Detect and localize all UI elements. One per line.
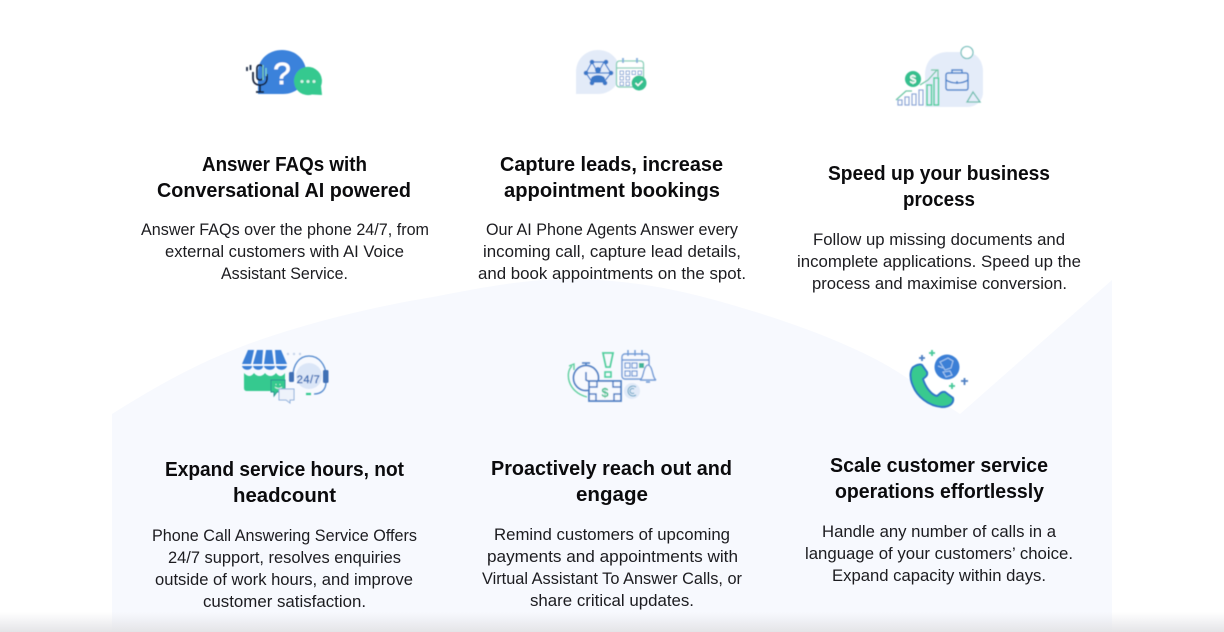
heading: capture leads: appointment bookings [504, 179, 720, 202]
heading: answer FAQs: Conversational AI powered [157, 179, 411, 202]
background wave shape [112, 279, 1112, 632]
text block: expand service hours: customer satisfaction. [203, 593, 366, 611]
text block: proactively reach out: share critical updates. [530, 592, 694, 610]
text block: capture leads [478, 221, 746, 283]
heading: capture leads: Capture leads, increase [500, 153, 723, 176]
text block: answer FAQs [141, 221, 429, 283]
heading: capture leads [500, 153, 723, 202]
text block: scale customer service: Handle any number of calls in a [822, 523, 1057, 541]
heading: proactively reach out: Proactively reach out and [491, 457, 732, 480]
text block: answer FAQs: Assistant Service. [221, 265, 348, 283]
heading: speed up business: Speed up your business [828, 162, 1050, 185]
text block: proactively reach out: Virtual Assistant To Answer Calls, or [482, 570, 742, 588]
heading: expand service hours [165, 458, 404, 507]
text block: expand service hours: outside of work hours, and improve [155, 571, 413, 589]
icon: stopwatch, money, alert and calendar bell: $ [601, 385, 609, 400]
text block: proactively reach out: payments and appointments with [487, 548, 738, 566]
heading: answer FAQs [157, 153, 411, 202]
icon: network and calendar [576, 50, 646, 94]
text block: speed up business [797, 231, 1081, 293]
panel: proactively reach out [482, 350, 742, 610]
heading: expand service hours: headcount [233, 484, 336, 507]
text block: speed up business: incomplete applications. Speed up the [797, 253, 1081, 271]
icon: growth chart and briefcase: $ [910, 72, 917, 86]
text block: answer FAQs: Answer FAQs over the phone 24/7, from [141, 221, 429, 239]
heading: scale customer service: operations effortlessly [835, 480, 1045, 503]
panel: answer FAQs [141, 50, 429, 283]
icon: phone with globe [911, 350, 968, 407]
text block: expand service hours: Phone Call Answering Service Offers [152, 527, 417, 545]
icon: growth chart and briefcase [896, 46, 983, 107]
icon: storefront and 24/7 headset: 24/7 [297, 374, 320, 386]
heading: expand service hours: Expand service hours, not [165, 458, 404, 481]
text block: expand service hours: 24/7 support, resolves enquiries [168, 549, 401, 567]
panel: expand service hours [152, 350, 417, 611]
heading: scale customer service [830, 454, 1048, 503]
text block: capture leads: Our AI Phone Agents Answer every [486, 221, 739, 239]
icon: stopwatch, money, alert and calendar bell [568, 350, 656, 401]
panel: scale customer service [805, 350, 1073, 585]
icon: chat bubbles and microphone: ? [273, 56, 291, 91]
text block: scale customer service: Expand capacity within days. [832, 567, 1046, 585]
panel: capture leads [478, 50, 746, 283]
heading: speed up business: process [903, 188, 975, 211]
heading: answer FAQs: Answer FAQs with [202, 153, 367, 176]
heading: speed up business [828, 162, 1050, 211]
heading: proactively reach out [491, 457, 732, 506]
heading: scale customer service: Scale customer service [830, 454, 1048, 477]
text block: speed up business: Follow up missing documents and [813, 231, 1065, 249]
text block: speed up business: process and maximise conversion. [812, 275, 1067, 293]
panel: speed up business [797, 46, 1081, 293]
heading: proactively reach out: engage [576, 483, 648, 506]
text block: scale customer service [805, 523, 1073, 585]
bottom edge shadow [0, 612, 1224, 632]
text block: capture leads: and book appointments on the spot. [478, 265, 746, 283]
icon: storefront and 24/7 headset [242, 350, 328, 403]
text block: capture leads: incoming call, capture lead details, [483, 243, 741, 261]
text block: proactively reach out: Remind customers of upcoming [494, 526, 730, 544]
text block: expand service hours [152, 527, 417, 611]
icon: chat bubbles and microphone [247, 50, 322, 95]
text block: answer FAQs: external customers with AI Voice [165, 243, 404, 261]
text block: proactively reach out [482, 526, 742, 610]
text block: scale customer service: language of your customers’ choice. [805, 545, 1073, 563]
